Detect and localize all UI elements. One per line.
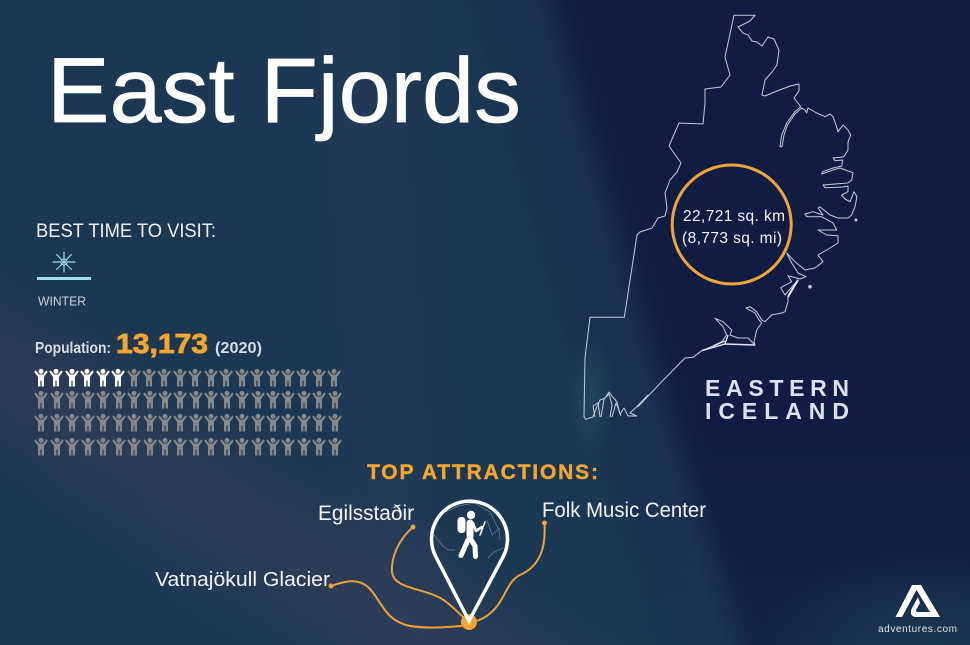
- logo: adventures.com: [878, 585, 957, 635]
- icon: hiker: [458, 511, 485, 556]
- callout: area circle: [672, 165, 791, 284]
- label: winter: WINTER: [38, 294, 86, 308]
- population heading: Population:: [35, 340, 111, 357]
- population heading: (2020): [215, 340, 262, 357]
- logo text: adventures.com: [878, 624, 957, 635]
- title: East Fjords: [47, 40, 521, 142]
- pictogram: population: [34, 369, 342, 456]
- panel: best time to visit: [36, 221, 216, 308]
- population heading: 13,173: [116, 328, 208, 359]
- season bar: [37, 277, 91, 280]
- attraction: Egilsstaðir: Egilsstaðir: [318, 502, 414, 525]
- logo mark: [896, 585, 940, 617]
- pin map texture: [434, 503, 503, 558]
- icon: location pin with hiker: [432, 501, 508, 630]
- region label: EASTERN: [705, 375, 849, 401]
- icon: snowflake: [53, 252, 75, 272]
- attraction: Vatnajökull Glacier: Vatnajökull Glacier: [155, 569, 330, 591]
- region label: ICELAND: [705, 398, 849, 424]
- connector lines: [328, 520, 547, 628]
- region label: [705, 375, 849, 424]
- heading: best time to visit: BEST TIME TO VISIT:: [36, 221, 216, 242]
- population heading: [35, 328, 262, 359]
- callout: area circle: (8,773 sq. mi): [682, 230, 782, 247]
- heading: top attractions: TOP ATTRACTIONS:: [367, 461, 598, 484]
- callout: area circle: 22,721 sq. km: [683, 208, 785, 225]
- map: eastern iceland outline: [584, 15, 857, 419]
- attraction: Folk Music Center: Folk Music Center: [542, 499, 706, 522]
